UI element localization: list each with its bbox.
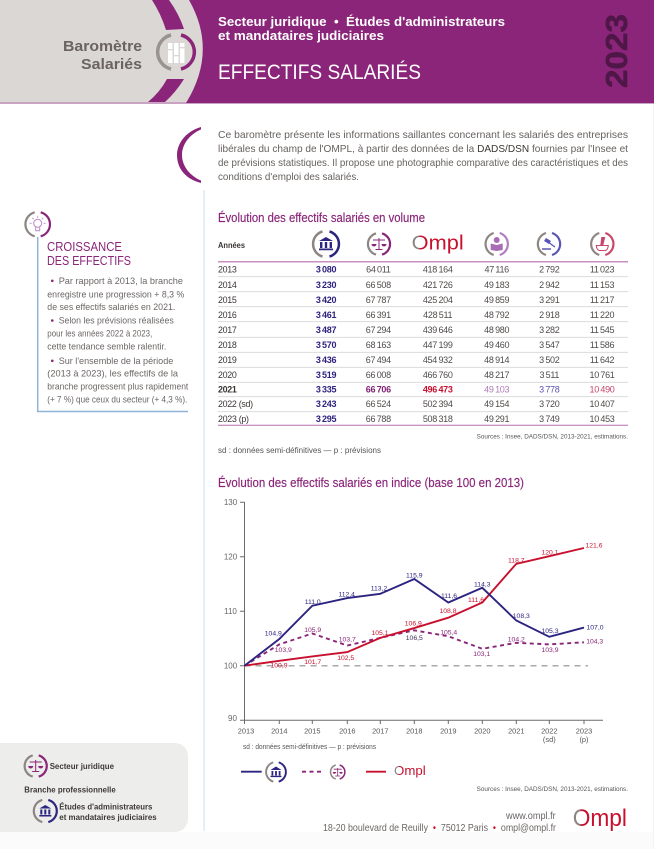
table header: Années: [218, 241, 246, 250]
table rows: 508 318: [423, 414, 453, 424]
icon: mortar: [591, 233, 613, 255]
table rows: 49 103: [484, 384, 510, 394]
axes: 2022: [541, 726, 558, 736]
table rows: 425 204: [423, 295, 453, 305]
label: secteur: Secteur juridique: [50, 762, 115, 771]
intro text with bracket: [177, 127, 628, 183]
table rows: 10 407: [589, 399, 615, 409]
data labels: 108,8: [439, 608, 457, 615]
table rows: 3 511: [539, 370, 559, 380]
table: volumes: [218, 232, 628, 425]
table rows: 68 163: [366, 340, 391, 350]
axes: (p): [579, 735, 589, 744]
table rows: 11 153: [590, 280, 614, 290]
table rows: 3 436: [316, 355, 336, 365]
data labels: 104,2: [508, 636, 525, 643]
vertical divider: [204, 190, 205, 831]
data labels: 104,9: [265, 631, 282, 638]
data labels: 103,9: [541, 647, 559, 654]
table rows: 11 586: [590, 340, 614, 350]
axes: 110: [224, 607, 237, 616]
table rows: 48 914: [484, 355, 510, 365]
data labels: 105,4: [440, 630, 457, 637]
table heading: Évolution des effectifs salariés en volume: [218, 210, 425, 225]
chart legend: [241, 762, 426, 782]
icon: bank: [34, 800, 57, 822]
table rows: 64 011: [366, 264, 391, 274]
reference line at 100: [244, 665, 588, 667]
table rows: 67 787: [366, 295, 391, 305]
intro text with bracket: conditions d'emploi des salariés.: [218, 172, 359, 183]
table rows: 2018: [218, 340, 237, 350]
table rows: 49 183: [484, 280, 510, 290]
icon: gavel: [538, 233, 560, 255]
table rows: 2019: [218, 355, 237, 365]
panel text: (+ 7 %) que ceux du secteur (+ 4,3 %).: [47, 394, 187, 405]
sector title: Secteur juridique • Études d'administrateurs: [218, 14, 505, 29]
panel text: cette tendance semble ralentir.: [47, 341, 166, 352]
panel text: branche progressent plus rapidement: [47, 381, 189, 392]
panel text: Par rapport à 2013, la branche: [59, 276, 183, 287]
data labels: 113,2: [371, 586, 387, 593]
table rows: 49 859: [484, 295, 510, 305]
footer contact: 18-20 boulevard de Reuilly • 75012 Paris • ompl@ompl.fr: [323, 823, 556, 834]
table rows: 3 420: [316, 295, 336, 305]
panel heading: DES EFFECTIFS: [47, 254, 131, 268]
table rows: 48 792: [484, 310, 510, 320]
panel text: Sur l'ensemble de la période: [59, 356, 173, 367]
series: ompl: [244, 548, 584, 666]
table rows: 10 490: [589, 384, 615, 394]
axes: 130: [224, 498, 238, 507]
table rows: 48 980: [484, 325, 510, 335]
chart note: sd : données semi-définitives — p : prévisions: [243, 744, 376, 751]
series: etudes: [244, 579, 584, 666]
table rows: 2 918: [539, 310, 560, 320]
data labels: 114,3: [474, 581, 491, 588]
data labels: 105,1: [371, 630, 389, 637]
intro text with bracket: de prévisions statistiques. Il propose une photographie comparative des caractéristiques et des: [218, 158, 628, 169]
icon: bank: [313, 232, 339, 256]
data labels: 115,9: [406, 573, 423, 580]
table rows: 10 761: [589, 370, 615, 380]
icon: scales: [330, 765, 345, 779]
data labels: 101,7: [304, 659, 321, 666]
icon: light bulb: [25, 212, 50, 236]
header band: [0, 0, 654, 104]
table rows: 447 199: [423, 340, 453, 350]
table rows: [218, 264, 615, 424]
table rows: 11 023: [590, 264, 614, 274]
table rows: 3 570: [316, 340, 336, 350]
table rows: 502 394: [423, 399, 453, 409]
table rows: 439 646: [423, 325, 453, 335]
panel text: pour les années 2022 à 2023,: [47, 329, 152, 340]
data labels: 118,7: [508, 558, 525, 565]
table rows: 3 282: [539, 325, 560, 335]
table rows: 10 453: [589, 414, 615, 424]
data labels: 121,6: [585, 543, 603, 550]
table rows: 2022 (sd): [218, 399, 253, 409]
intro text with bracket: Ce baromètre présente les informations saillantes concernant les salariés des entreprises: [218, 130, 628, 141]
table rows: 2014: [218, 280, 237, 290]
panel: croissance des effectifs: [25, 212, 189, 412]
axes: 2015: [304, 726, 321, 736]
table rows: 48 217: [484, 370, 510, 380]
table rows: 66 788: [366, 414, 391, 424]
table rows: 2017: [218, 325, 237, 335]
data labels: 103,1: [473, 651, 490, 658]
data labels: 104,3: [586, 639, 603, 646]
table rows: 2 942: [539, 280, 560, 290]
table rows: 3 502: [539, 355, 560, 365]
table rows: 2 792: [539, 264, 560, 274]
table rows: 11 220: [590, 310, 614, 320]
table rows: 49 291: [484, 414, 510, 424]
table note: sd : données semi-définitives — p : prévisions: [218, 446, 381, 455]
panel heading: CROISSANCE: [47, 240, 122, 254]
table rows: 454 932: [423, 355, 453, 365]
panel text: (2013 à 2023), les effectifs de la: [47, 369, 179, 380]
data labels: [265, 543, 604, 670]
table rows: 11 545: [590, 325, 614, 335]
footer contact: www.ompl.fr: [505, 811, 556, 822]
logo: Ompl: Ompl: [394, 763, 426, 778]
table rows: 3 519: [316, 370, 336, 380]
icon: scales: [368, 233, 390, 255]
label: etudes: et mandataires judiciaires: [59, 813, 157, 822]
data labels: 103,9: [275, 647, 292, 654]
data labels: 111,0: [305, 599, 321, 606]
intro text with bracket: libérales du champ de l'OMPL, à partir des données de la DADS/DSN fournies par l'Insee et: [218, 144, 628, 155]
table rows: 49 460: [484, 340, 510, 350]
axes: 2020: [474, 726, 491, 736]
icon: person: [486, 233, 508, 255]
axes: 2016: [339, 726, 356, 736]
table rows: 2023 (p): [218, 414, 249, 424]
barometre label: Baromètre: [63, 39, 142, 55]
axes: 2018: [406, 726, 423, 736]
axes: 2021: [508, 726, 525, 736]
table rows: 66 706: [366, 384, 391, 394]
panel text: [47, 276, 189, 405]
axes: 100: [224, 662, 238, 670]
panel text: Selon les prévisions réalisées: [59, 316, 174, 327]
label: etudes: [59, 802, 157, 822]
table rows: 3 230: [316, 280, 336, 290]
panel: legend of sectors: [0, 743, 188, 832]
sector title: [218, 14, 505, 43]
data labels: 120,1: [541, 550, 559, 557]
chart sources: Sources : Insee, DADS/DSN, 2013-2021, estimations.: [477, 787, 628, 793]
series: secteur juridique: [244, 630, 584, 666]
data labels: 111,6: [441, 593, 457, 600]
icon: bank: [266, 762, 286, 782]
table rows: 47 116: [485, 264, 509, 274]
table rows: 421 726: [423, 280, 453, 290]
table rows: 3 461: [316, 310, 336, 320]
page title: EFFECTIFS SALARIÉS: [218, 61, 421, 84]
table rows: 2020: [218, 370, 237, 380]
panel text: enregistre une progression + 8,3 %: [47, 289, 185, 300]
table rows: 11 217: [590, 295, 614, 305]
table rows: 3 291: [539, 295, 560, 305]
table rows: 66 524: [366, 399, 391, 409]
chart heading: Évolution des effectifs salariés en indice (base 100 en 2013): [218, 475, 524, 490]
axes: (sd): [543, 735, 556, 744]
logo: Ompl: Ompl: [412, 232, 464, 254]
data labels: 108,3: [513, 613, 530, 620]
table sources: Sources : Insee, DADS/DSN, 2013-2021, estimations.: [477, 434, 628, 440]
table rows: 2016: [218, 310, 237, 320]
table rows: 66 508: [366, 280, 391, 290]
data labels: 105,9: [304, 627, 321, 634]
barometre label: Salariés: [81, 57, 142, 73]
data labels: 107,0: [586, 624, 604, 631]
table rows: 66 391: [366, 310, 391, 320]
table rows: 49 154: [484, 399, 510, 409]
table rows: 3 295: [316, 414, 336, 424]
table rows: 67 294: [366, 325, 391, 335]
table rows: 3 335: [316, 384, 336, 394]
table rows: 2013: [218, 264, 237, 274]
table rows: 67 494: [366, 355, 391, 365]
data labels: 111,6: [468, 597, 484, 604]
data labels: 106,9: [405, 620, 422, 627]
table rows: 3 749: [539, 414, 560, 424]
table rows: 496 473: [423, 384, 453, 394]
icon: barometer sliders: [158, 35, 194, 69]
table rows: 66 008: [366, 370, 391, 380]
table rows: 3 243: [316, 399, 336, 409]
axes: 2013: [238, 726, 254, 736]
icon: scales: [25, 755, 47, 777]
panel text: de ses effectifs salariés en 2021.: [47, 302, 175, 313]
table rows: 2021: [218, 384, 237, 394]
axes: 2023: [576, 726, 592, 736]
axes: 120: [224, 552, 238, 562]
table rows: 418 164: [423, 264, 453, 274]
axes: 90: [228, 714, 237, 723]
table rows: 3 778: [539, 384, 560, 394]
table rows: 3 547: [539, 340, 560, 350]
table rows: 466 760: [423, 370, 453, 380]
data labels: 106,5: [406, 635, 423, 642]
axes: 2017: [372, 726, 389, 736]
data labels: 100,9: [270, 663, 288, 670]
table rows: 11 642: [590, 355, 614, 365]
data labels: 105,3: [541, 628, 559, 635]
table rows: 3 487: [316, 325, 336, 335]
label: etudes: Études d'administrateurs: [59, 802, 153, 811]
table rows: 3 080: [316, 264, 336, 274]
barometre label: [63, 39, 142, 73]
footer logo: Ompl: [573, 805, 627, 832]
panel heading: [47, 240, 131, 268]
table rows: 2015: [218, 295, 237, 305]
axes: [224, 498, 603, 744]
sector title: et mandataires judiciaires: [218, 28, 384, 43]
axes: 2019: [440, 726, 457, 736]
line chart: [224, 498, 604, 744]
data labels: 103,7: [339, 637, 356, 644]
label: branche: Branche professionnelle: [24, 786, 116, 795]
table header: [218, 232, 613, 256]
footer contact: [323, 811, 556, 834]
data labels: 102,5: [337, 655, 354, 662]
data labels: 112,4: [338, 592, 355, 599]
axes: 2014: [271, 726, 288, 736]
table rows: 3 720: [539, 399, 560, 409]
year: 2023: [599, 14, 634, 88]
table rows: 428 511: [423, 310, 453, 320]
